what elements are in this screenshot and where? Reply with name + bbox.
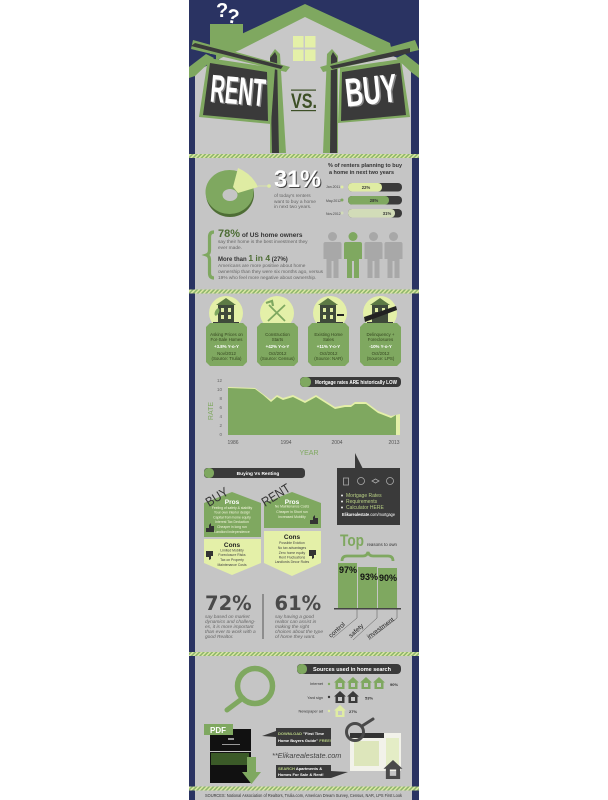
- stat: 31%: want to buy a home: [274, 199, 316, 205]
- stat: 72%: say based on market: [205, 614, 250, 620]
- stat: 61%: 61%: [274, 592, 321, 615]
- pictogram: home search sources: Internet: [310, 682, 324, 686]
- pictogram: home search sources: 53%: [365, 696, 373, 700]
- area chart: mortgage rates: 10: [217, 387, 222, 392]
- bar chart: renters planning to buy: Jan.2011: [326, 185, 340, 189]
- callout: download: FREE!: [318, 738, 331, 743]
- area chart: mortgage rates: RATE: [208, 402, 215, 420]
- bar chart: top reasons: safety: [348, 622, 366, 639]
- panel: rent cons: Possible Eviction: [279, 541, 305, 545]
- text: home owners: 19% who feel more negative about ownership.: [218, 275, 316, 281]
- callout: search: Apartments &: [295, 766, 322, 771]
- area chart: mortgage rates: 8: [219, 396, 222, 401]
- label: buying vs renting: Buying Vs Renting: [237, 471, 279, 477]
- sign: rent: [191, 40, 290, 153]
- heading: rent: RENT: [259, 480, 293, 510]
- panel: buy pros: [204, 492, 261, 537]
- pictogram: home search sources: Yard sign: [307, 696, 323, 700]
- card: construction starts: Starts: [272, 337, 284, 342]
- bar chart: top reasons: 93%: [360, 572, 378, 582]
- heading: top reasons: reasons to own: [367, 542, 397, 547]
- icon: question marks: ?: [225, 5, 241, 29]
- bar chart: top reasons: [328, 563, 401, 641]
- callout: mortgage calculator: Requirements: [346, 499, 378, 505]
- area chart: mortgage rates: 0: [219, 432, 222, 437]
- icon: map magnifier: [346, 719, 373, 740]
- stat: 31%: [274, 166, 322, 210]
- eaves: [189, 54, 419, 78]
- pictogram: home search sources: 27%: [349, 709, 357, 714]
- card: existing home sales: Existing Home: [314, 332, 343, 337]
- panel: buy cons: Tax on Property: [220, 558, 244, 562]
- text: home owners: More than 1 in 4 (27%): [218, 253, 288, 263]
- panel: buy pros: Your own interior design: [214, 510, 250, 514]
- bar chart: renters planning to buy: May.2012: [326, 199, 341, 203]
- label: sources: Sources used in home search: [313, 667, 392, 673]
- pictogram: home search sources: 90%: [390, 682, 398, 687]
- icon: magnifier: [227, 668, 272, 710]
- card: delinquency and foreclosures: Oct/2012: [372, 351, 390, 356]
- stat: 72%: 72%: [205, 592, 252, 615]
- stat: 31%: 31%: [275, 167, 322, 194]
- icon: question marks: [216, 0, 241, 29]
- panel: buy cons: [204, 539, 261, 575]
- stat: 72%: than ever to work with a: [205, 629, 256, 635]
- panel: buy cons: Limited Mobility: [220, 548, 244, 552]
- stat: 61%: say having a good: [275, 614, 314, 620]
- label: buying vs renting: [204, 468, 305, 478]
- text: home owners: 78% of US home owners: [218, 228, 303, 240]
- bar chart: renters planning to buy: 31%: [383, 211, 391, 216]
- callout: download: DOWNLOAD: [278, 731, 302, 736]
- callout: mortgage calculator: Elikarealestate.com/mortgage: [342, 512, 396, 517]
- card: asking prices: For-Sale Homes: [211, 337, 243, 342]
- card: construction starts: Oct/2012: [269, 351, 287, 356]
- divider: stats: [262, 594, 264, 639]
- header: house illustration: [189, 0, 419, 155]
- card: asking prices: Nov/2012: [217, 351, 236, 356]
- panel: rent cons: [264, 531, 321, 576]
- area chart: mortgage rates: 2: [219, 423, 222, 428]
- card: construction starts: [257, 296, 298, 366]
- callout: mortgage calculator: [337, 453, 400, 525]
- sign: buy: BUY: [343, 66, 399, 116]
- callout: search: Homes For Sale & Rent!: [278, 772, 324, 777]
- stat: 31%: 31%: [274, 166, 321, 193]
- panel: buy pros: Landlord independence: [214, 530, 250, 534]
- card: construction starts: Construction: [265, 332, 290, 337]
- card: delinquency and foreclosures: Delinquency +: [367, 332, 395, 337]
- sources footer: SOURCES: National Association of Realtors, Trulia.com, American Dream Survey, Census, NAR, LPS First Look: [205, 793, 403, 798]
- stat: 61%: making the right: [275, 624, 310, 630]
- card: asking prices: +3.8% Y-o-Y: [214, 344, 239, 349]
- panel: buy cons: Foreclosure Risks: [218, 553, 246, 557]
- background panel: [189, 0, 419, 800]
- bar chart: renters planning to buy: [326, 163, 403, 218]
- pictogram: home search sources: Newspaper ad: [299, 710, 323, 714]
- area chart: mortgage rates: YEAR: [299, 450, 319, 457]
- panel: rent cons: No tax advantages: [278, 546, 306, 550]
- icon: question marks: ?: [216, 0, 228, 22]
- panel: buy cons: Maintenance Costs: [217, 563, 247, 567]
- stat: 31%: of today's renters: [274, 193, 311, 199]
- vs label: VS.: [291, 90, 317, 113]
- area chart: mortgage rates: 12: [217, 378, 222, 383]
- stat: 72%: es, it is more important: [205, 624, 254, 630]
- callout: mortgage calculator: Calculator HERE: [346, 505, 384, 511]
- bar chart: renters planning to buy: % of renters planning to buy: [328, 163, 403, 169]
- text: home owners: say their home is the best investment they: [218, 239, 308, 245]
- sign: rent: RENT: [210, 69, 269, 116]
- pdf guide thumbnails: PDF: [210, 726, 226, 735]
- card: existing home sales: (Source: NAR): [314, 356, 343, 361]
- callout: search: SEARCH: [278, 766, 295, 771]
- bar chart: top reasons: 97%: [339, 565, 357, 575]
- callout: mortgage calculator: Mortgage Rates: [346, 493, 382, 499]
- area chart: mortgage rates: 4: [219, 414, 222, 419]
- bar chart: renters planning to buy: 22%: [362, 185, 370, 190]
- bar chart: top reasons: 90%: [379, 573, 397, 583]
- roof: [216, 4, 394, 60]
- label: mortgage rates: [300, 377, 401, 387]
- panel: rent pros: [264, 492, 321, 528]
- area chart: mortgage rates: 1994: [280, 440, 292, 446]
- panel: buy pros: Feeling of safety & stability: [212, 506, 252, 510]
- stat: 72%: dynamics and challeng-: [205, 619, 256, 625]
- stat: 61%: [274, 592, 323, 640]
- card: asking prices: (Source: Trulia): [211, 356, 242, 361]
- icon: attic window: [293, 36, 316, 61]
- panel: rent pros: Pros: [285, 499, 300, 506]
- callout: download: Home Buyers Guide": [278, 738, 318, 743]
- text: website: **Elikarealestate.com: [272, 751, 341, 760]
- panel: rent cons: Landlords Decor Rules: [275, 560, 310, 564]
- bar chart: top reasons: investment: [366, 616, 396, 641]
- card: existing home sales: Oct/2012: [320, 351, 338, 356]
- panel: rent cons: Rent Fluctuations: [279, 556, 305, 560]
- stat: 61%: realtor can assist in: [275, 619, 317, 625]
- panel: rent pros: Increased Mobility: [278, 515, 306, 519]
- icon: brace: [206, 232, 214, 278]
- card: asking prices: Asking Prices on: [210, 332, 243, 337]
- text: home owners: ever made.: [218, 245, 242, 251]
- panel: buy cons: Cons: [224, 542, 241, 549]
- card: existing home sales: +11% Y-o-Y: [317, 344, 340, 349]
- sign: buy: [320, 40, 419, 153]
- panel: rent cons: Zero home equity: [279, 551, 305, 555]
- house body: [195, 17, 411, 155]
- pictogram: home search sources: [299, 677, 398, 717]
- label: mortgage rates: Mortgage rates ARE historically LOW: [315, 380, 397, 386]
- panel: rent pros: No Maintenance Costs: [275, 504, 309, 508]
- area chart: mortgage rates: 6: [219, 405, 222, 410]
- sign: buy: BUY: [345, 67, 401, 116]
- bar chart: renters planning to buy: a home in next two years: [329, 170, 394, 176]
- card: construction starts: +42% Y-o-Y: [266, 344, 289, 349]
- stat: 31%: in next two years.: [274, 204, 311, 210]
- callout: download: [262, 728, 331, 746]
- stat: 61%: choices about the type: [275, 629, 323, 635]
- pdf guide thumbnails: [204, 724, 261, 784]
- text: home owners: [218, 228, 324, 281]
- area chart: mortgage rates: 2013: [388, 440, 400, 446]
- area chart: mortgage rates: [208, 378, 400, 457]
- bar chart: renters planning to buy: Nov.2012: [326, 212, 341, 216]
- area chart: mortgage rates: 2004: [331, 440, 343, 446]
- card: delinquency and foreclosures: -10% Y-o-Y: [369, 344, 392, 349]
- stat: 72%: good Realtor.: [205, 634, 234, 640]
- panel: rent pros: Cheaper in Short run: [276, 510, 308, 514]
- card: delinquency and foreclosures: Foreclosures: [368, 337, 394, 342]
- map screenshot: [350, 733, 401, 771]
- card: delinquency and foreclosures: [360, 296, 401, 366]
- callout: search: [276, 765, 348, 778]
- area chart: mortgage rates: 1986: [227, 440, 239, 446]
- bar chart: top reasons: control: [328, 621, 347, 639]
- bar chart: renters planning to buy: 28%: [370, 198, 378, 203]
- text: home owners: Americans are more positive about home: [218, 263, 306, 269]
- callout: download: "First Time: [302, 731, 325, 736]
- panel: rent cons: Cons: [284, 534, 301, 541]
- card: existing home sales: [308, 296, 349, 366]
- panel: body: [195, 155, 412, 800]
- pie chart: 31%: [206, 168, 271, 217]
- panel: buy pros: Pros: [225, 499, 240, 506]
- card: delinquency and foreclosures: (Source: LPS): [367, 356, 395, 361]
- divider bands: [189, 154, 419, 790]
- panel: buy pros: Cheaper in long run: [217, 525, 247, 529]
- stat: 72%: [205, 592, 256, 640]
- label: sources: [297, 664, 401, 674]
- stat: 61%: of home they want.: [275, 634, 316, 640]
- card: construction starts: (Source: Census): [260, 356, 295, 361]
- card: existing home sales: Sales: [323, 337, 335, 342]
- panel: buy pros: Interest Tax Deduction: [215, 520, 249, 524]
- heading: top reasons: Top: [340, 531, 364, 550]
- heading: top reasons: [340, 531, 397, 561]
- icon: house: [384, 760, 402, 779]
- heading: buy: BUY: [203, 484, 231, 510]
- text: home owners: ownership than they were six months ago, versus: [218, 269, 324, 275]
- sign: rent: RENT: [209, 68, 267, 115]
- pictogram: people: [324, 232, 402, 278]
- icon: chimney: [210, 24, 243, 54]
- panel: buy pros: Capital from home equity: [213, 516, 251, 520]
- card: asking prices: [206, 296, 247, 366]
